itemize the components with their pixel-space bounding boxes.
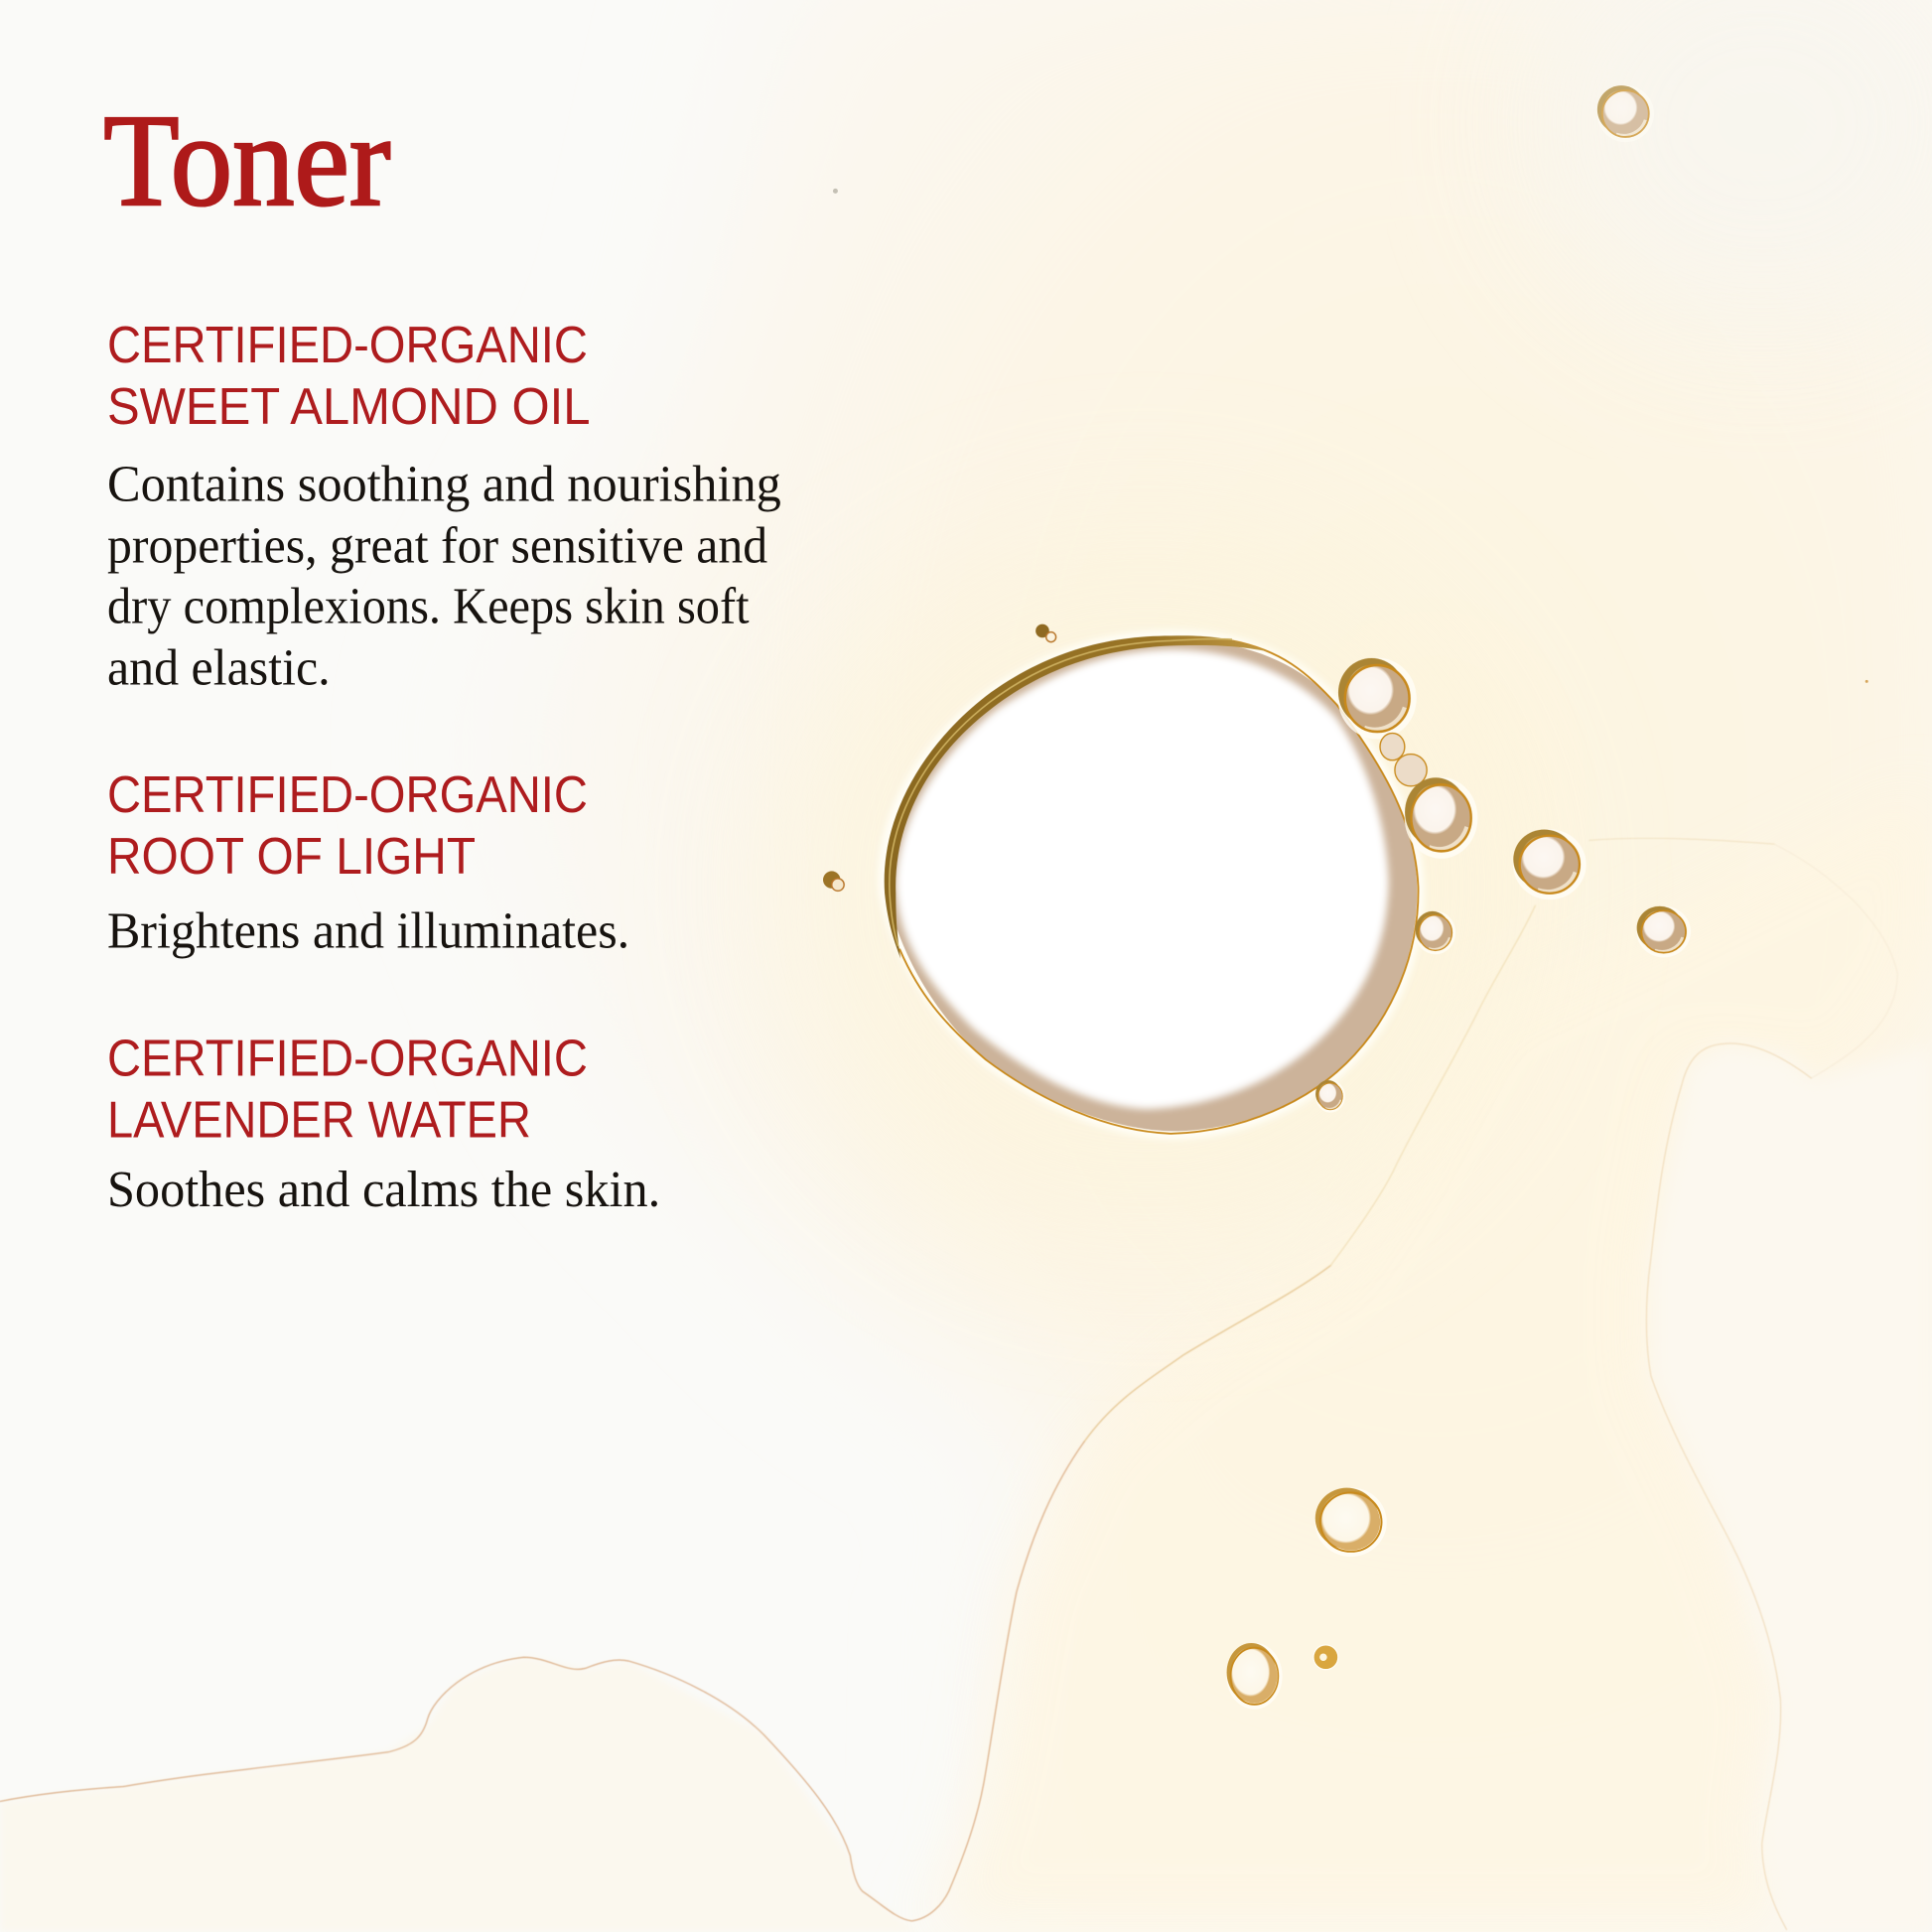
bubble: right of drop <box>1513 829 1587 899</box>
thick gold upper-left rim <box>885 635 1269 959</box>
section: sweet almond oil <box>107 317 781 696</box>
description: lavender water: Soothes and calms the skin. <box>107 1162 660 1218</box>
heading: sweet almond oil: CERTIFIED-ORGANIC <box>107 317 588 374</box>
description: sweet almond oil: properties, great for sensitive and <box>107 518 767 575</box>
bubble: far right <box>1636 905 1691 957</box>
bubble: lower group large <box>1314 1487 1387 1557</box>
title: Toner <box>103 87 390 233</box>
tan oil rim band <box>887 639 1417 1131</box>
white milk centre <box>896 649 1389 1109</box>
description: sweet almond oil: Contains soothing and nourishing <box>107 456 781 512</box>
description: sweet almond oil: and elastic. <box>107 639 331 696</box>
section: root of light <box>107 766 629 959</box>
thin gold outer rim line <box>899 640 1419 1134</box>
description: sweet almond oil <box>107 456 781 696</box>
description: sweet almond oil: dry complexions. Keeps skin soft <box>107 578 750 634</box>
description: root of light: Brightens and illuminates. <box>107 902 629 959</box>
heading: root of light: ROOT OF LIGHT <box>107 828 476 886</box>
bubble: top right <box>1597 85 1654 142</box>
heading: lavender water: LAVENDER WATER <box>107 1092 531 1150</box>
section: lavender water <box>107 1030 660 1218</box>
heading: root of light: CERTIFIED-ORGANIC <box>107 766 588 824</box>
heading: sweet almond oil: SWEET ALMOND OIL <box>107 378 590 436</box>
bubble: lower group oval <box>1226 1643 1283 1710</box>
oil streak lines <box>0 838 1897 1930</box>
bubble: on bottom rim <box>1315 1080 1345 1113</box>
bubble: left droplet <box>823 871 844 891</box>
oil bubbles <box>823 85 1691 1710</box>
bubble: small pale pair <box>1380 733 1427 786</box>
heading: root of light <box>107 766 588 886</box>
main milk drop with gold rim <box>884 635 1419 1134</box>
bubble: top droplet <box>1035 624 1056 642</box>
heading: sweet almond oil <box>107 317 590 436</box>
bubble: lower group tiny <box>1313 1645 1338 1670</box>
bubble: drop right large <box>1405 777 1477 859</box>
heading: lavender water: CERTIFIED-ORGANIC <box>107 1030 588 1087</box>
bubble: on lower right rim <box>1415 911 1455 954</box>
heading: lavender water <box>107 1030 588 1150</box>
bubble: drop upper right large <box>1338 657 1417 739</box>
